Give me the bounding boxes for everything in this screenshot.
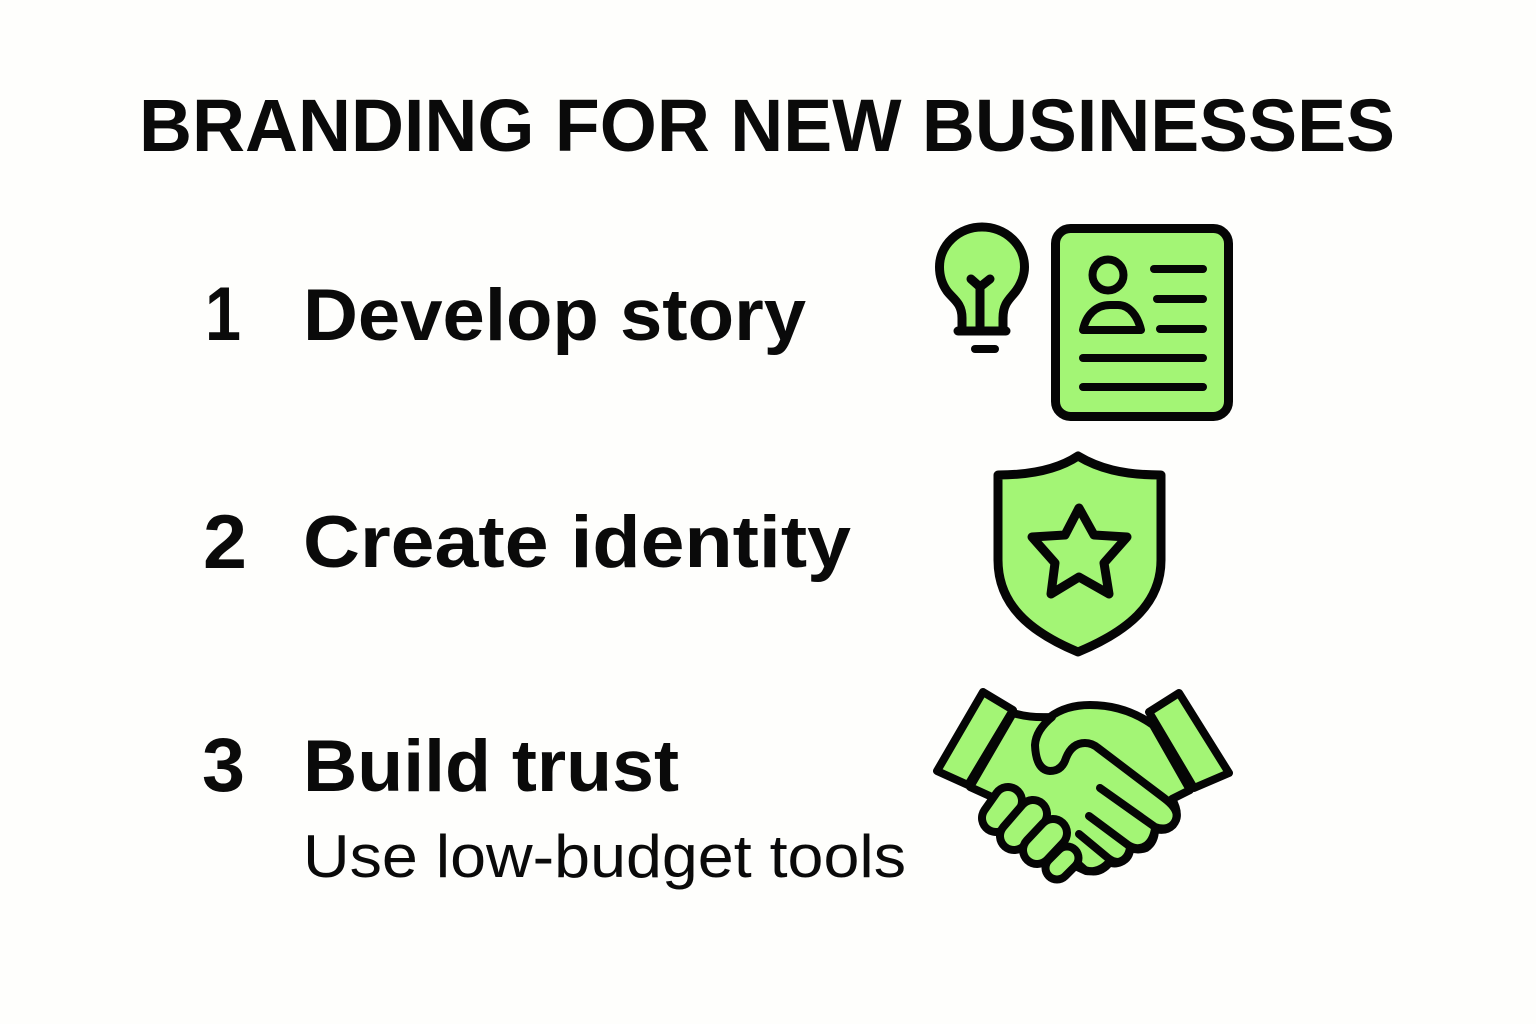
icon: handshake <box>937 692 1229 871</box>
step 2 label: Create identity <box>303 502 851 583</box>
step 1 <box>205 272 806 357</box>
step 2 number: 2 <box>203 500 247 585</box>
step 3 label: Build trust <box>303 726 679 807</box>
card portrait <box>1083 260 1141 330</box>
step 3 subtext: Use low-budget tools <box>303 823 906 890</box>
step 2 <box>203 500 851 585</box>
step 3 <box>202 723 679 808</box>
clasped hands <box>970 705 1190 871</box>
left cuff <box>937 692 1013 785</box>
star <box>1032 508 1127 594</box>
step 3 number: 3 <box>202 723 245 808</box>
step 1 number: 1 <box>205 272 241 357</box>
card text lines <box>1083 269 1203 387</box>
finger 4 <box>1057 858 1067 868</box>
finger 2 <box>1014 814 1033 836</box>
title: BRANDING FOR NEW BUSINESSES <box>139 84 1395 167</box>
icon: profile card <box>1056 228 1228 416</box>
right cuff <box>1149 693 1229 788</box>
step 1 label: Develop story <box>303 275 806 356</box>
finger 3 <box>1037 833 1053 850</box>
thumb and finger lines <box>1035 717 1177 828</box>
icon: shield with star <box>998 456 1161 652</box>
icon: lightbulb <box>940 227 1024 349</box>
finger 1 <box>996 801 1008 818</box>
